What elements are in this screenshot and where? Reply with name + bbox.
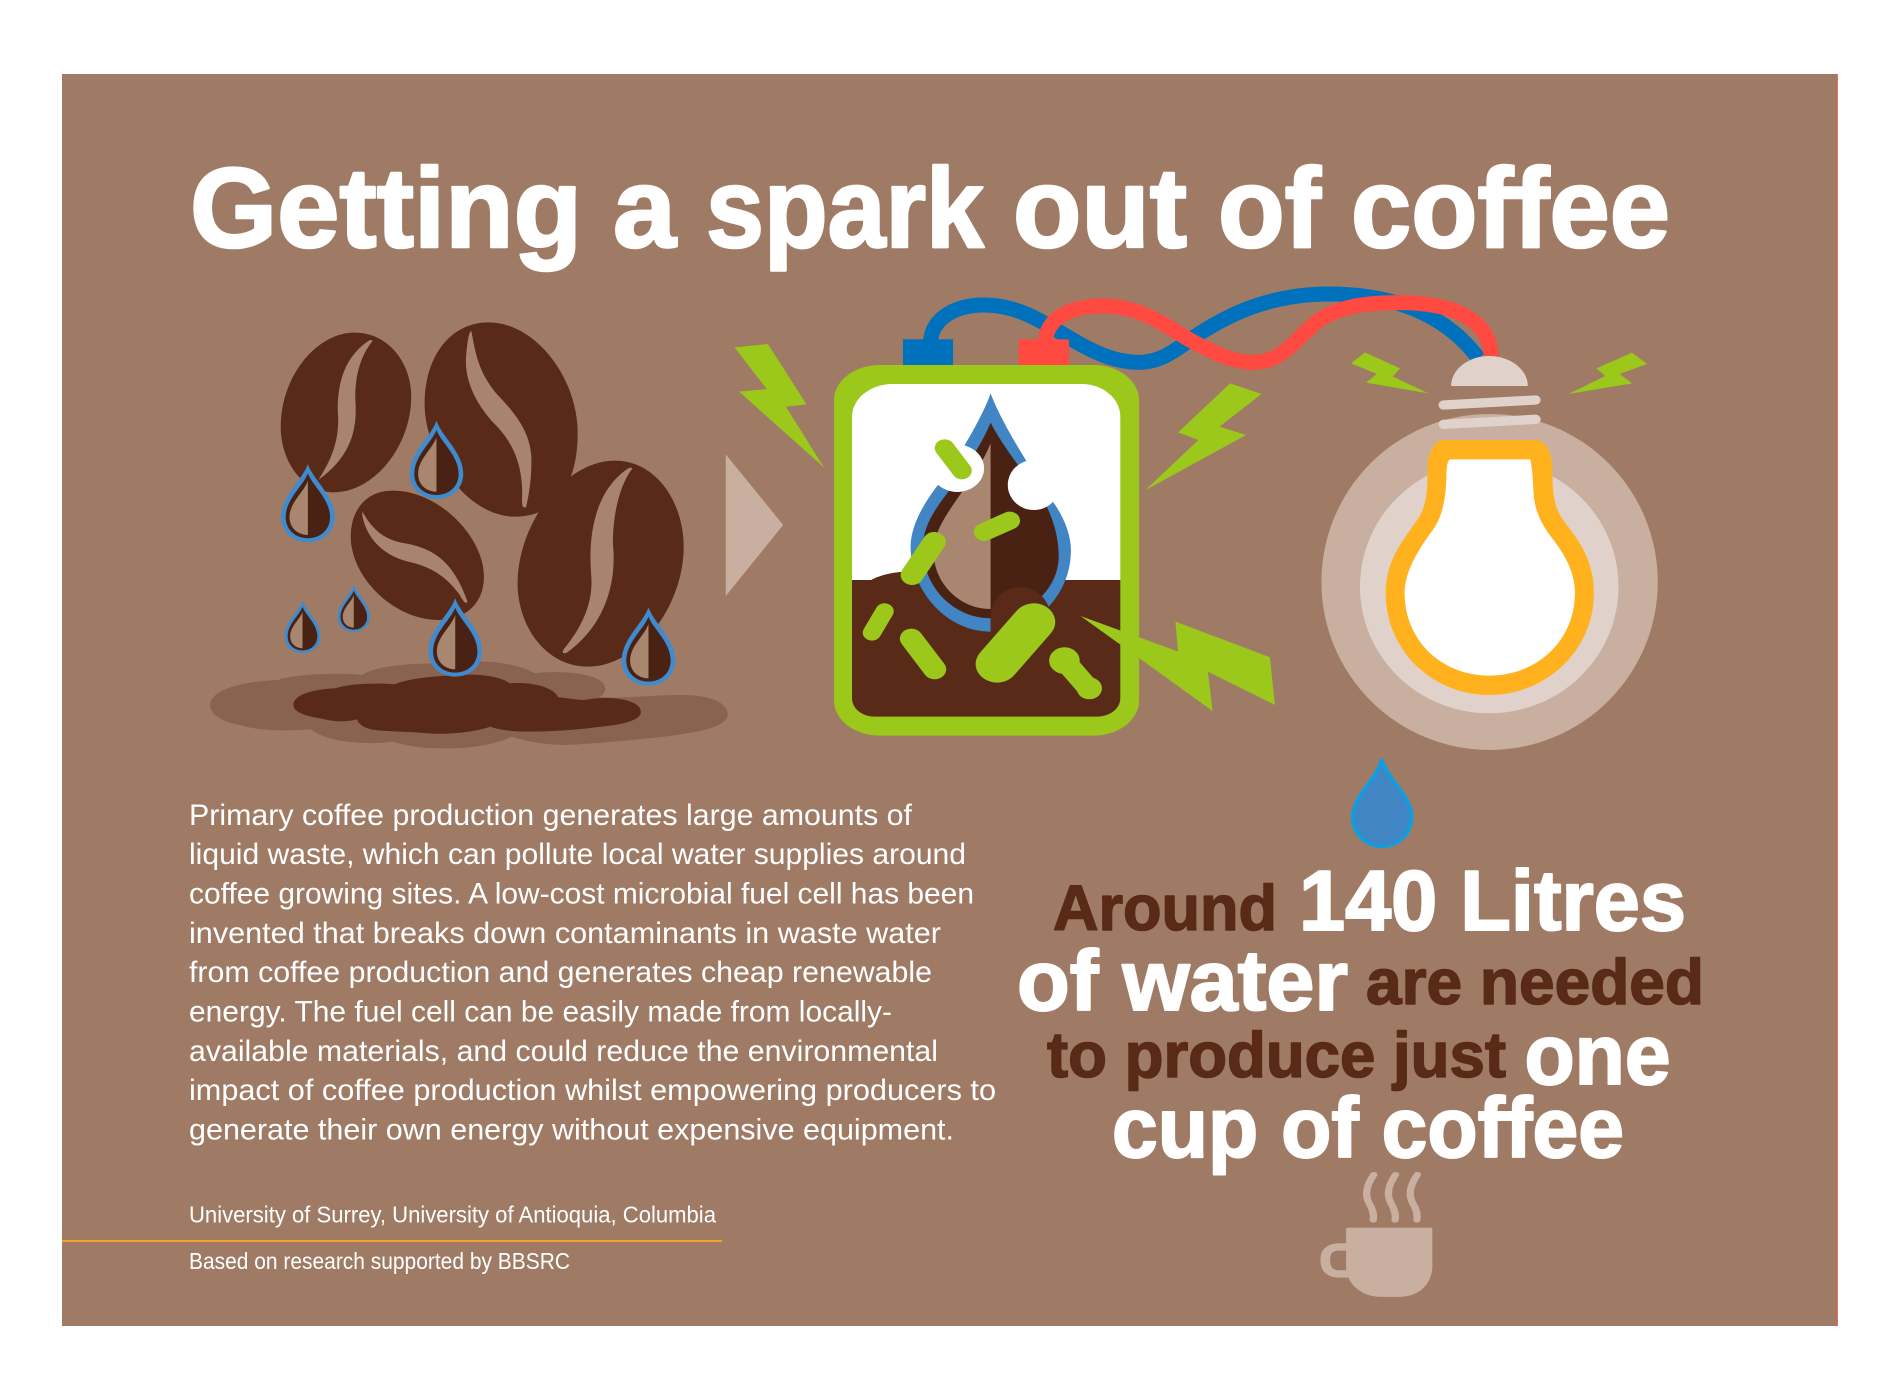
- waste pool: [210, 661, 728, 748]
- statistic callout: [1017, 854, 1704, 1176]
- title: coffee: [1351, 145, 1670, 271]
- statistic callout: cup of coffee: [1112, 1081, 1624, 1176]
- footer credits: [62, 1202, 722, 1274]
- illustration: coffee beans, drops and waste pool: [210, 322, 783, 748]
- fuel cell frame: [834, 365, 1139, 736]
- body text: invented that breaks down contaminants in waste water: [189, 917, 941, 950]
- bulb: [1386, 440, 1594, 695]
- body text: impact of coffee production whilst empowering producers to: [189, 1074, 996, 1107]
- waste water drops: [281, 421, 675, 686]
- statistic callout: Around: [1053, 872, 1277, 944]
- illustration: microbial fuel cell: [735, 294, 1491, 736]
- statistic callout: are needed: [1366, 946, 1704, 1018]
- body text: coffee growing sites. A low-cost microbial fuel cell has been: [189, 878, 974, 910]
- icon: water drop: [1353, 759, 1412, 847]
- statistic callout: one: [1524, 1008, 1670, 1103]
- statistic callout: of water: [1017, 934, 1348, 1029]
- title: spark: [706, 145, 984, 271]
- small spark left: [1351, 352, 1429, 393]
- illustration: glowing light bulb: [1321, 352, 1658, 750]
- body text: liquid waste, which can pollute local water supplies around: [189, 838, 966, 871]
- body text: [189, 799, 996, 1146]
- arrow: [726, 454, 783, 596]
- wires and terminals: [903, 294, 1491, 365]
- title: [190, 145, 1670, 271]
- footer credits: University of Surrey, University of Antioquia, Columbia: [189, 1202, 716, 1228]
- statistic callout: 140 Litres: [1299, 854, 1686, 949]
- glow halo: [1321, 414, 1658, 750]
- water drop inside cell: [911, 393, 1071, 646]
- spark bolt upper right: [1146, 383, 1262, 490]
- bulb cap and screw thread: [1444, 356, 1536, 424]
- spark bolt left: [735, 344, 824, 468]
- title: out: [1013, 145, 1187, 271]
- title: Getting: [190, 145, 582, 271]
- body text: from coffee production and generates cheap renewable: [189, 956, 932, 989]
- coffee beans: [281, 322, 684, 667]
- title: a: [613, 145, 677, 271]
- microbes: [872, 448, 1102, 699]
- statistic callout: to produce just: [1047, 1019, 1506, 1091]
- body text: generate their own energy without expensive equipment.: [189, 1114, 954, 1146]
- body text: Primary coffee production generates large amounts of: [189, 799, 913, 832]
- body text: available materials, and could reduce the environmental: [189, 1035, 938, 1068]
- body text: energy. The fuel cell can be easily made from locally-: [189, 996, 892, 1028]
- title: of: [1218, 145, 1321, 271]
- icon: coffee cup with steam: [1325, 1175, 1432, 1297]
- spark bolt lower right: [1081, 616, 1275, 711]
- footer credits: Based on research supported by BBSRC: [189, 1248, 570, 1274]
- small spark right: [1569, 353, 1647, 394]
